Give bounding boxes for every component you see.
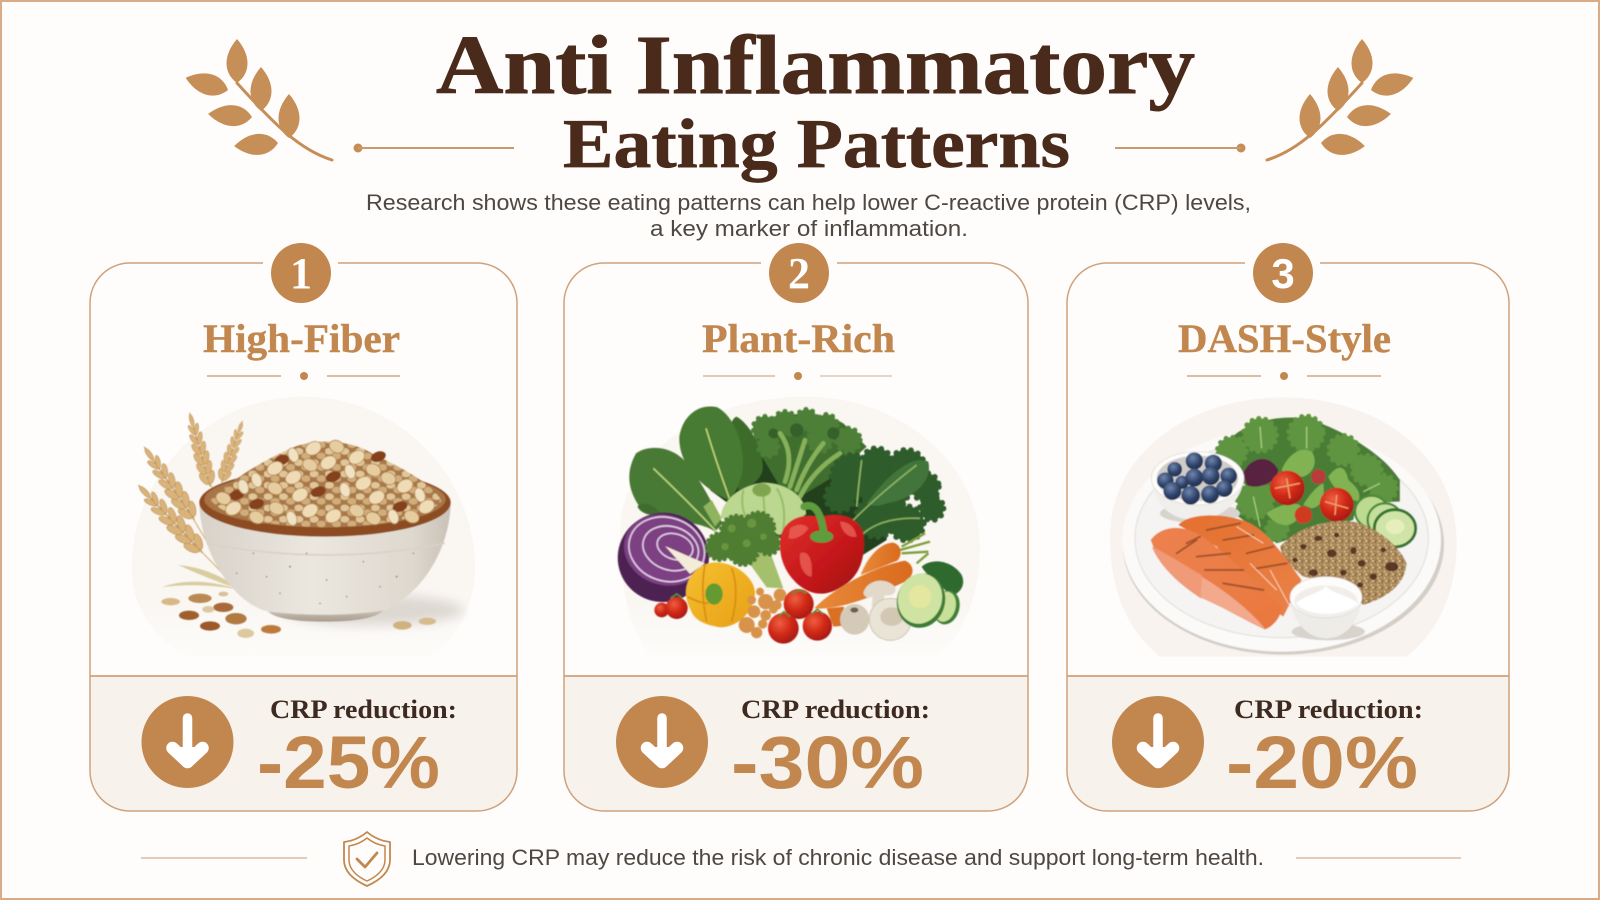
footer text: Lowering CRP may reduce the risk of chronic disease and support long-term health. bbox=[412, 845, 1264, 870]
chickpeas bbox=[739, 588, 786, 638]
illustration: bowl of oats and wheat bbox=[130, 397, 475, 657]
tomatoes bbox=[654, 589, 832, 644]
CRP result bbox=[1112, 695, 1423, 804]
salad bbox=[1215, 416, 1400, 543]
illustration: vegetables bbox=[611, 397, 980, 657]
number badge 1: 1 bbox=[290, 249, 312, 298]
mushrooms bbox=[840, 581, 911, 640]
value: -30% bbox=[731, 721, 924, 804]
icon: down arrow bbox=[142, 696, 234, 788]
quinoa bbox=[1280, 521, 1407, 605]
carrots bbox=[814, 533, 930, 627]
number badge 2: 2 bbox=[788, 249, 810, 298]
heading: High-Fiber: High-Fiber bbox=[203, 316, 400, 361]
blueberry bowl bbox=[1151, 452, 1244, 523]
right title ornament bbox=[1115, 144, 1246, 152]
ceramic bowl bbox=[199, 469, 451, 622]
footer note bbox=[141, 832, 1461, 886]
subtitle: a key marker of inflammation. bbox=[650, 216, 968, 241]
value: -20% bbox=[1226, 721, 1418, 804]
CRP result bbox=[142, 695, 457, 804]
panel: High-Fiber bbox=[90, 243, 517, 811]
header bbox=[183, 19, 1416, 241]
icon: down arrow bbox=[616, 696, 708, 788]
heading divider bbox=[207, 372, 400, 380]
pale cabbage bbox=[721, 483, 806, 535]
cucumber slices bbox=[1355, 496, 1416, 547]
grilled salmon bbox=[1151, 515, 1302, 629]
CRP label: CRP reduction: bbox=[1234, 695, 1423, 724]
panel: DASH-Style bbox=[1067, 243, 1509, 811]
value: -25% bbox=[257, 721, 440, 804]
subtitle: Research shows these eating patterns can help lower C-reactive protein (CRP) levels, bbox=[366, 190, 1251, 215]
icon: shield with check bbox=[344, 832, 390, 886]
number badge 2 bbox=[769, 243, 829, 303]
icon: left laurel sprig bbox=[183, 39, 332, 160]
red bell pepper bbox=[780, 506, 864, 594]
oats bbox=[211, 438, 442, 527]
heading divider bbox=[1187, 372, 1381, 380]
heading: DASH-Style: DASH-Style bbox=[1178, 316, 1391, 361]
heading divider bbox=[703, 372, 892, 380]
CRP label: CRP reduction: bbox=[270, 695, 457, 724]
CRP label: CRP reduction: bbox=[741, 695, 930, 724]
plate bbox=[1122, 428, 1444, 655]
spinach leaves bbox=[629, 406, 763, 532]
leafy greens and stems bbox=[753, 409, 867, 497]
dark foliage backing bbox=[710, 450, 887, 557]
CRP result bbox=[616, 695, 930, 804]
number badge 3: 3 bbox=[1271, 250, 1295, 297]
scattered seeds bbox=[161, 592, 436, 638]
heading: Plant-Rich: Plant-Rich bbox=[702, 316, 895, 361]
yellow bell pepper bbox=[686, 562, 755, 627]
title line one: Anti Inflammatory bbox=[436, 19, 1195, 112]
number badge 1 bbox=[271, 243, 331, 303]
icon: down arrow bbox=[1112, 696, 1204, 788]
wheat stalks bbox=[130, 410, 250, 589]
subtitle bbox=[366, 190, 1251, 241]
cucumber and leaf bbox=[891, 561, 963, 633]
number badge 3 bbox=[1253, 243, 1313, 303]
broccoli bbox=[707, 512, 783, 588]
icon: right laurel sprig bbox=[1267, 39, 1416, 160]
kale bbox=[825, 448, 944, 541]
panel: Plant-Rich bbox=[564, 243, 1028, 811]
title line two: Eating Patterns bbox=[563, 106, 1070, 183]
purple cabbage bbox=[611, 504, 716, 609]
left title ornament bbox=[354, 144, 514, 152]
cream dip bowl bbox=[1290, 577, 1365, 640]
illustration: salmon plate bbox=[1110, 397, 1457, 657]
